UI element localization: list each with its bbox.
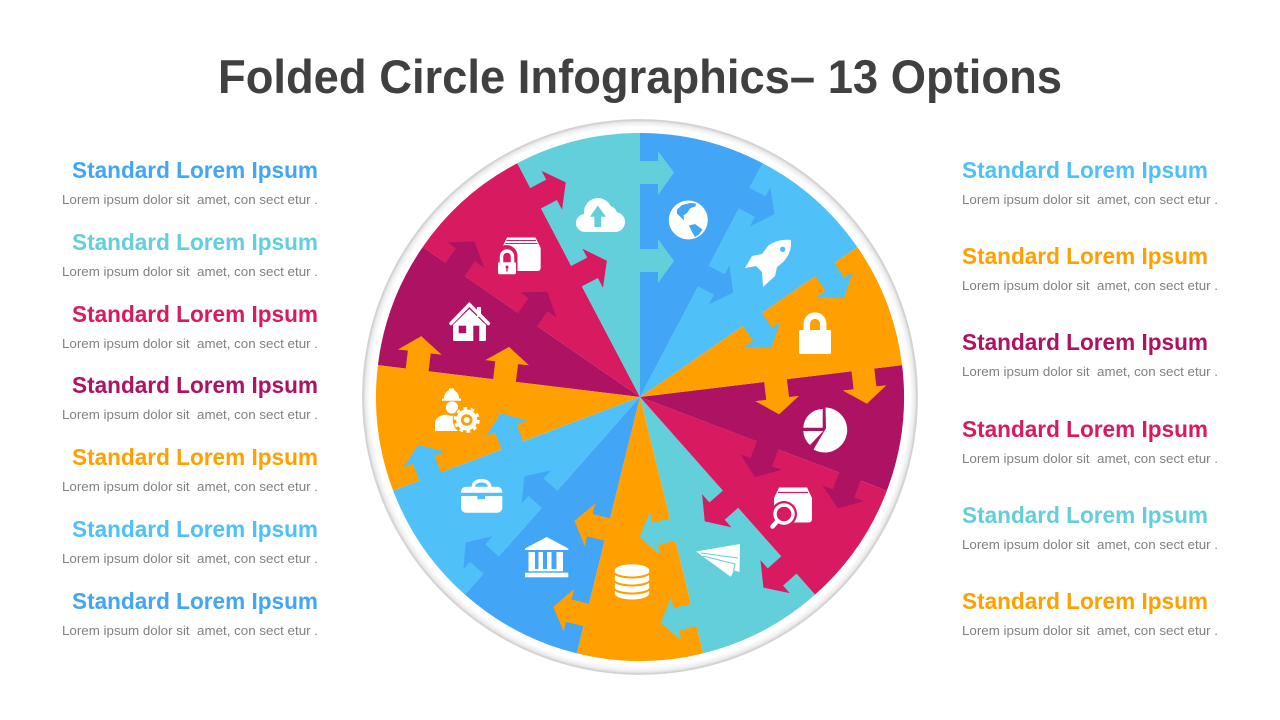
segment: light blue lower left	[381, 365, 684, 605]
right item 3	[962, 329, 1218, 379]
left item 3	[62, 301, 318, 351]
icon: bank	[525, 537, 568, 577]
right item 5: Standard Lorem Ipsum	[962, 502, 1208, 528]
right item 3: Lorem ipsum dolor sit amet, con sect etur .	[962, 364, 1218, 379]
icon: box with lock	[496, 238, 541, 277]
segment: orange right	[625, 243, 906, 431]
left item 7: Lorem ipsum dolor sit amet, con sect etur .	[62, 623, 318, 638]
title: Folded Circle Infographics– 13 Options	[218, 50, 1062, 103]
icon: toolbox	[461, 481, 502, 513]
left item 2	[62, 229, 318, 279]
right item 3: Standard Lorem Ipsum	[962, 329, 1208, 355]
icon: globe	[669, 200, 708, 240]
icon: pie chart	[803, 408, 847, 452]
right item 1	[962, 157, 1218, 207]
icon: cloud upload	[576, 198, 625, 232]
right item 6	[962, 588, 1218, 638]
segment: magenta right	[628, 282, 930, 522]
segment: blue lower left	[439, 374, 732, 676]
left item 4	[62, 372, 318, 422]
right item 2: Lorem ipsum dolor sit amet, con sect etur .	[962, 278, 1218, 293]
left item 5: Standard Lorem Ipsum	[72, 444, 318, 470]
icon: box with magnifier	[771, 488, 812, 527]
left item 2: Lorem ipsum dolor sit amet, con sect etur .	[62, 264, 318, 279]
left item 1: Lorem ipsum dolor sit amet, con sect etur .	[62, 192, 318, 207]
left item 6: Lorem ipsum dolor sit amet, con sect etur .	[62, 551, 318, 566]
left item 1: Standard Lorem Ipsum	[72, 157, 318, 183]
panel: left text list	[62, 157, 318, 638]
panel: right text list	[962, 157, 1218, 638]
right item 4: Standard Lorem Ipsum	[962, 416, 1208, 442]
left item 5	[62, 444, 318, 494]
left item 6: Standard Lorem Ipsum	[72, 516, 318, 542]
left item 4: Lorem ipsum dolor sit amet, con sect etur .	[62, 407, 318, 422]
left item 2: Standard Lorem Ipsum	[72, 229, 318, 255]
segment: crimson lower	[615, 316, 907, 617]
icon: rocket	[745, 240, 791, 287]
left item 3: Lorem ipsum dolor sit amet, con sect etur .	[62, 336, 318, 351]
segment: teal top	[517, 133, 674, 397]
icon: worker with gear	[435, 388, 481, 434]
segment: orange left	[363, 331, 644, 519]
left item 4: Standard Lorem Ipsum	[72, 372, 318, 398]
right item 2: Standard Lorem Ipsum	[962, 243, 1208, 269]
outer ring	[362, 119, 918, 675]
right item 5	[962, 502, 1218, 552]
right item 5: Lorem ipsum dolor sit amet, con sect etur .	[962, 537, 1218, 552]
icon: paper plane	[696, 544, 740, 577]
segment: teal lower	[607, 368, 822, 661]
arrows: crimson into teal	[525, 163, 617, 297]
segment: blue upper	[531, 106, 793, 413]
folded circle chart	[353, 106, 930, 683]
left item 6	[62, 516, 318, 566]
left item 7	[62, 588, 318, 638]
right item 2	[962, 243, 1218, 293]
right item 4: Lorem ipsum dolor sit amet, con sect etur .	[962, 451, 1218, 466]
right item 1: Lorem ipsum dolor sit amet, con sect etur .	[962, 192, 1218, 207]
segment: magenta upper	[353, 219, 659, 498]
icon: padlock	[799, 316, 831, 354]
left item 1	[62, 157, 318, 207]
right item 4	[962, 416, 1218, 466]
icon: house	[451, 304, 488, 341]
icon: database	[614, 564, 650, 600]
right item 6: Lorem ipsum dolor sit amet, con sect etur .	[962, 623, 1218, 638]
segment: light blue upper	[570, 146, 877, 425]
segment: orange bottom	[544, 389, 759, 683]
right item 6: Standard Lorem Ipsum	[962, 588, 1208, 614]
left item 5: Lorem ipsum dolor sit amet, con sect etur .	[62, 479, 318, 494]
segment: crimson upper	[409, 147, 670, 454]
left item 7: Standard Lorem Ipsum	[72, 588, 318, 614]
right item 1: Standard Lorem Ipsum	[962, 157, 1208, 183]
left item 3: Standard Lorem Ipsum	[72, 301, 318, 327]
